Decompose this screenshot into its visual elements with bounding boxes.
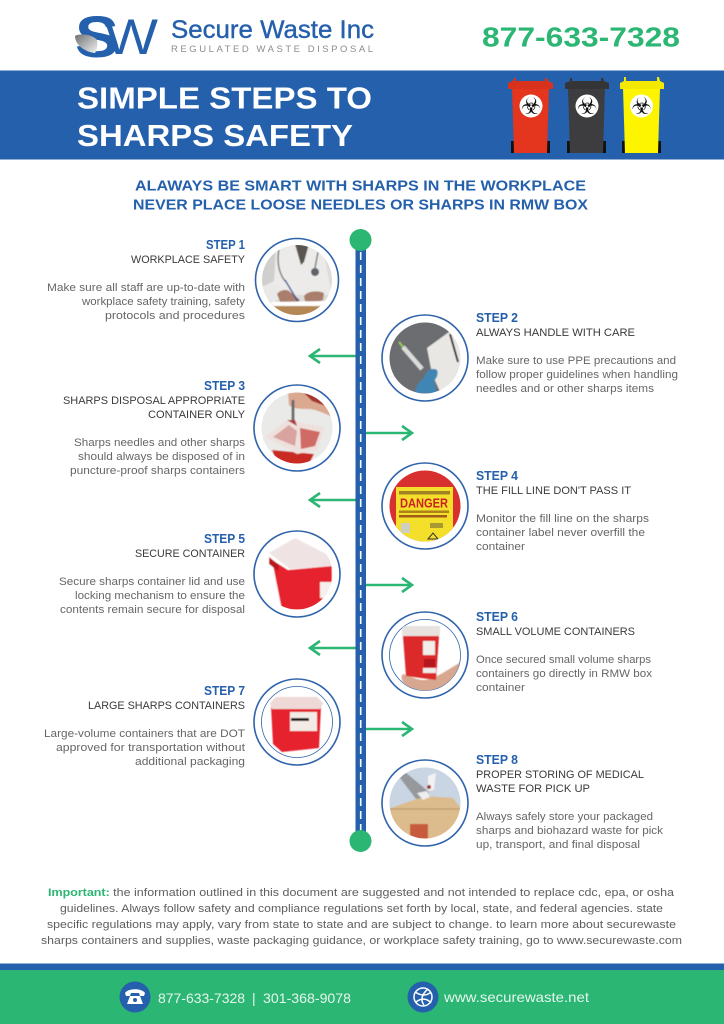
- step 2 text: Make sure to use PPE precautions and: [476, 355, 676, 367]
- step 4 text: STEP 4: [476, 469, 518, 483]
- panel: step 1: [47, 238, 338, 322]
- step 5 text: [59, 532, 245, 616]
- footer: [0, 964, 724, 1024]
- step 3 text: SHARPS DISPOSAL APPROPRIATE: [63, 395, 245, 407]
- arrow: to step 2 side: [366, 426, 412, 440]
- panel: step 2: [382, 311, 678, 401]
- step 8 text: STEP 8: [476, 753, 518, 767]
- step 3 text: puncture-proof sharps containers: [70, 465, 246, 477]
- step 4 text: container label never overfill the: [476, 527, 645, 539]
- important notice: specific regulations may apply, vary from state to state and are subject to change. to learn more about securewaste: [47, 919, 676, 931]
- step 7 text: STEP 7: [204, 684, 245, 698]
- title band: [0, 70, 724, 160]
- arrow: to step 4 side: [366, 578, 412, 592]
- step 2 text: STEP 2: [476, 311, 518, 325]
- footer phone numbers: 301-368-9078: [263, 990, 351, 1006]
- step 1 text: WORKPLACE SAFETY: [131, 254, 246, 266]
- timeline: [350, 229, 372, 852]
- step 5 text: SECURE CONTAINER: [135, 548, 245, 560]
- step 4 text: [476, 469, 650, 553]
- step 3 text: CONTAINER ONLY: [148, 409, 246, 421]
- step 1 text: workplace safety training, safety: [81, 296, 246, 308]
- arrow: to step 6 side: [366, 722, 412, 736]
- important notice: sharps containers and supplies, waste packaging guidance, or workplace safety training, go to www.securewaste.com: [41, 935, 682, 947]
- step 4 text: Monitor the fill line on the sharps: [476, 513, 650, 525]
- step 6 text: Once secured small volume sharps: [476, 654, 652, 666]
- arrow: to step 1 side: [310, 349, 356, 363]
- important notice: [41, 887, 682, 947]
- step 7 text: approved for transportation without: [56, 742, 245, 754]
- footer website: www.securewaste.net: [443, 989, 589, 1005]
- panel: step 4: [382, 463, 650, 553]
- icon: cardboard waste box photo: [382, 760, 468, 846]
- icon: large sharps container photo: [254, 679, 340, 765]
- panel: step 5: [59, 531, 340, 617]
- title: SIMPLE STEPS TO: [77, 80, 372, 116]
- step 8 text: up, transport, and final disposal: [476, 839, 640, 851]
- step 6 text: containers go directly in RMW box: [476, 668, 653, 680]
- logo mark: [75, 5, 159, 70]
- step 4 text: THE FILL LINE DON'T PASS IT: [476, 485, 631, 497]
- step 7 text: additional packaging: [135, 756, 245, 768]
- icon: yellow biohazard bin: ☣: [631, 94, 652, 120]
- icon: doctor writing photo: [256, 238, 338, 322]
- icon: small container on hand photo: [382, 612, 468, 698]
- step 5 text: Secure sharps container lid and use: [59, 576, 245, 588]
- footer phone numbers: |: [252, 990, 256, 1006]
- icon: red biohazard bin: [508, 78, 553, 153]
- step 6 text: SMALL VOLUME CONTAINERS: [476, 626, 635, 638]
- step 2 text: follow proper guidelines when handling: [476, 369, 678, 381]
- step 8 text: [476, 753, 664, 851]
- step 1 text: STEP 1: [206, 238, 245, 252]
- icon: globe: [408, 982, 438, 1012]
- icon: telephone: [120, 982, 150, 1012]
- step 1 text: [47, 238, 246, 322]
- step 2 text: [476, 311, 678, 395]
- step 4 text: container: [476, 541, 525, 553]
- logo mark: W: [104, 9, 159, 65]
- step 2 text: ALWAYS HANDLE WITH CARE: [476, 327, 635, 339]
- icon: red biohazard bin: ☣: [521, 94, 541, 120]
- title: [77, 80, 372, 153]
- step 1 text: protocols and procedures: [105, 310, 246, 322]
- step 7 text: Large-volume containers that are DOT: [44, 728, 245, 740]
- icon: secure sharps container photo: [254, 531, 340, 617]
- step 3 text: should always be disposed of in: [78, 451, 245, 463]
- step 6 text: [476, 610, 653, 694]
- logo: [75, 5, 374, 70]
- header phone number: 877-633-7328: [482, 22, 680, 52]
- company name: Secure Waste Inc: [171, 16, 374, 44]
- step 6 text: container: [476, 682, 525, 694]
- panel: step 6: [382, 610, 653, 698]
- company tagline: REGULATED WASTE DISPOSAL: [171, 44, 373, 55]
- icon: sharps container disposal photo: [254, 385, 340, 471]
- icon: yellow biohazard bin: [620, 77, 664, 153]
- step 3 text: STEP 3: [204, 379, 245, 393]
- subtitle: [133, 178, 588, 214]
- step 3 text: [63, 379, 246, 477]
- step 8 text: PROPER STORING OF MEDICAL: [476, 769, 644, 781]
- icon: black biohazard bin: ☣: [577, 94, 597, 120]
- icon: gloved hand with syringe photo: [382, 315, 468, 401]
- title: SHARPS SAFETY: [77, 118, 353, 153]
- step 8 text: WASTE FOR PICK UP: [476, 783, 590, 795]
- step 7 text: [44, 684, 245, 768]
- panel: step 8: [382, 753, 664, 851]
- step 3 text: Sharps needles and other sharps: [74, 437, 246, 449]
- important notice: guidelines. Always follow safety and compliance regulations set forth by local, state, and federal agencies. state: [60, 903, 663, 915]
- step 5 text: locking mechanism to ensure the: [75, 590, 245, 602]
- step 6 text: STEP 6: [476, 610, 518, 624]
- subtitle: ALAWAYS BE SMART WITH SHARPS IN THE WORKPLACE: [135, 178, 586, 194]
- step 8 text: Always safely store your packaged: [476, 811, 653, 823]
- arrow: to step 3 side: [310, 493, 356, 507]
- panel: step 7: [44, 679, 340, 768]
- footer phone numbers: 877-633-7328: [158, 990, 245, 1006]
- icon: danger label photo: [382, 463, 468, 549]
- panel: step 3: [63, 379, 340, 477]
- arrow: to step 5 side: [310, 641, 356, 655]
- step 5 text: STEP 5: [204, 532, 245, 546]
- icon: danger label photo: DANGER: [400, 496, 448, 510]
- important notice: Important: the information outlined in this document are suggested and not intended to replace cdc, epa, or osha: [48, 887, 675, 899]
- icon: black biohazard bin: [565, 78, 609, 153]
- step 8 text: sharps and biohazard waste for pick: [476, 825, 664, 837]
- logo mark: S: [75, 5, 119, 70]
- step 1 text: Make sure all staff are up-to-date with: [47, 282, 245, 294]
- footer phone numbers: [158, 990, 351, 1006]
- step 2 text: needles and or other sharps items: [476, 383, 655, 395]
- step 7 text: LARGE SHARPS CONTAINERS: [88, 700, 245, 712]
- step 5 text: contents remain secure for disposal: [60, 604, 245, 616]
- subtitle: NEVER PLACE LOOSE NEEDLES OR SHARPS IN RMW BOX: [133, 198, 588, 214]
